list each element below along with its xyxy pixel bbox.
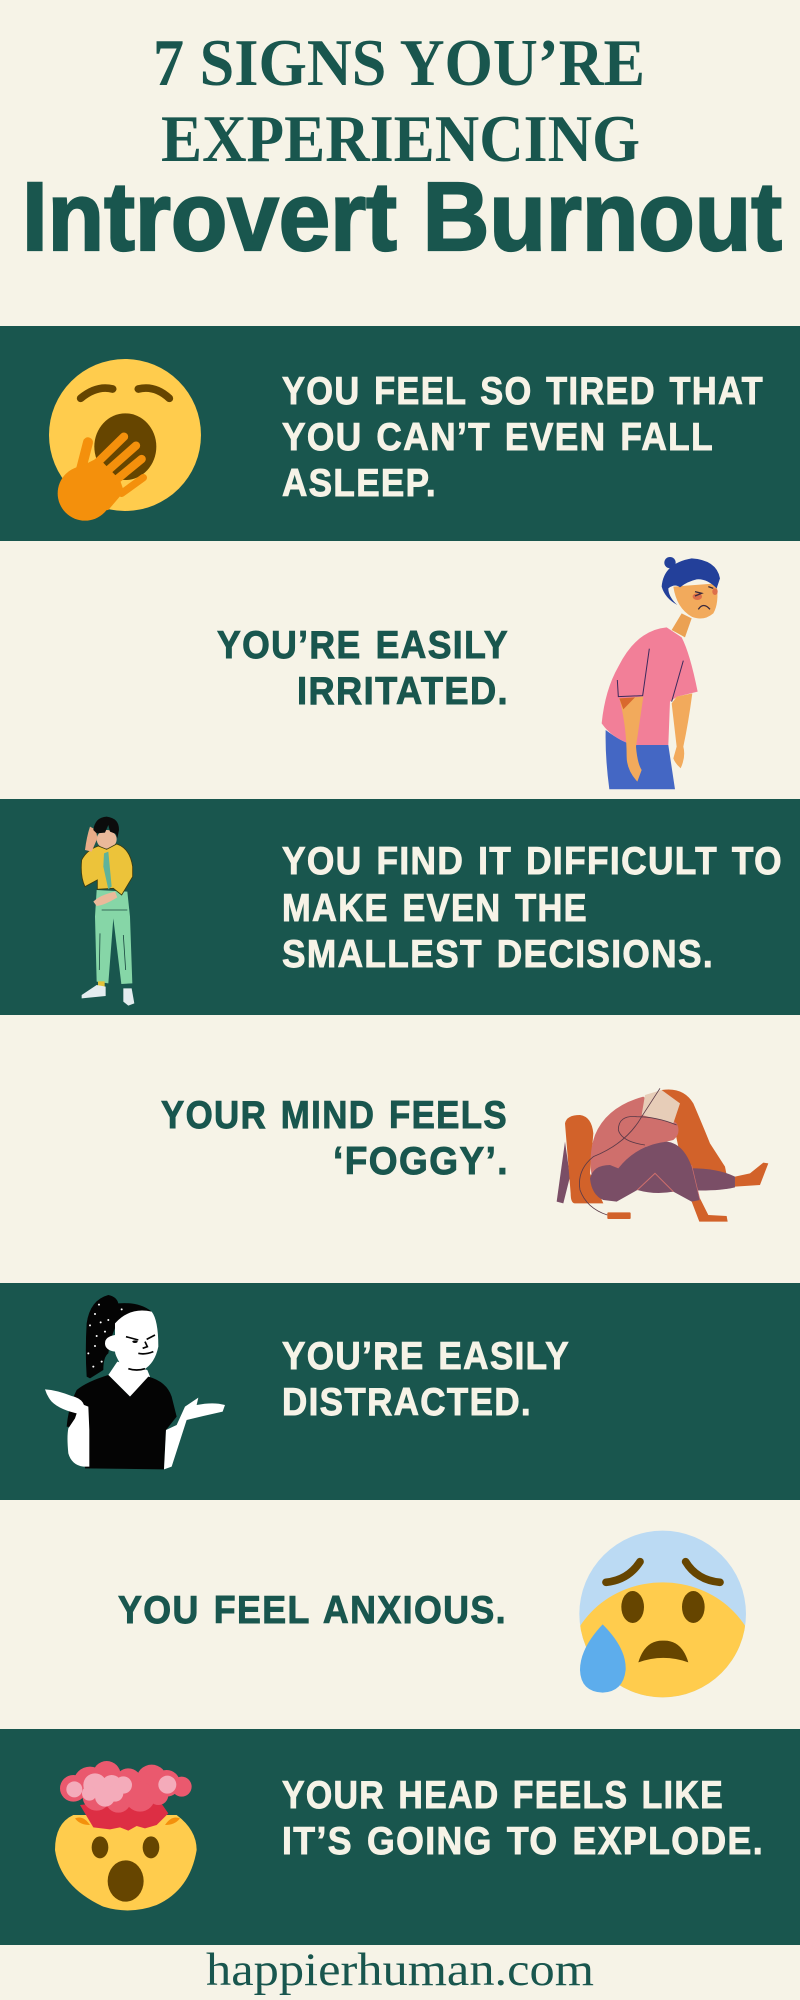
text: sign 2: YOU’RE EASILY: [217, 624, 509, 667]
icon: exhausted woman in chair: [557, 1088, 768, 1222]
icon: person holding head: [81, 817, 134, 1006]
text: sign 2: IRRITATED.: [297, 670, 509, 713]
title: [22, 26, 782, 271]
text: sign 1: YOU CAN’T EVEN FALL: [282, 416, 714, 459]
text: sign 4: [161, 1094, 509, 1183]
text: sign 7: IT’S GOING TO EXPLODE.: [282, 1820, 764, 1863]
text: sign 4: YOUR MIND FEELS: [161, 1094, 508, 1137]
text: sign 7: [282, 1774, 764, 1863]
panel: sign 7 explode: [0, 1729, 800, 1945]
text: sign 5: YOU’RE EASILY: [282, 1335, 570, 1378]
footer url: happierhuman.com: [206, 1944, 594, 1996]
text: sign 1: ASLEEP.: [282, 462, 437, 505]
icon: yawning face: [49, 359, 201, 521]
title: EXPERIENCING: [161, 102, 640, 176]
text: sign 2: [217, 624, 509, 713]
panel: sign 2 irritated: [217, 557, 720, 789]
title: Introvert Burnout: [22, 162, 782, 271]
panel: sign 1 tired: [0, 326, 800, 541]
panel: sign 6 anxious: [118, 1530, 746, 1698]
title: 7 SIGNS YOU’RE: [153, 26, 645, 100]
text: sign 6: YOU FEEL ANXIOUS.: [118, 1589, 507, 1632]
text: sign 3: SMALLEST DECISIONS.: [282, 933, 714, 976]
panel: sign 4 foggy: [161, 1088, 768, 1222]
text: sign 7: YOUR HEAD FEELS LIKE: [282, 1774, 724, 1817]
panel: sign 3 decisions: [0, 799, 800, 1015]
text: sign 4: ‘FOGGY’.: [333, 1140, 509, 1183]
text: sign 3: [282, 840, 783, 976]
text: sign 5: [282, 1335, 570, 1424]
icon: anxious face with sweat: [579, 1530, 746, 1698]
panel: sign 5 distracted: [0, 1283, 800, 1500]
text: sign 3: MAKE EVEN THE: [282, 887, 588, 930]
text: sign 5: DISTRACTED.: [282, 1381, 532, 1424]
icon: shrugging woman: [45, 1295, 225, 1469]
text: sign 1: [282, 370, 764, 505]
icon: exploding head: [55, 1761, 197, 1910]
icon: slumped person in pink shirt: [602, 557, 720, 789]
